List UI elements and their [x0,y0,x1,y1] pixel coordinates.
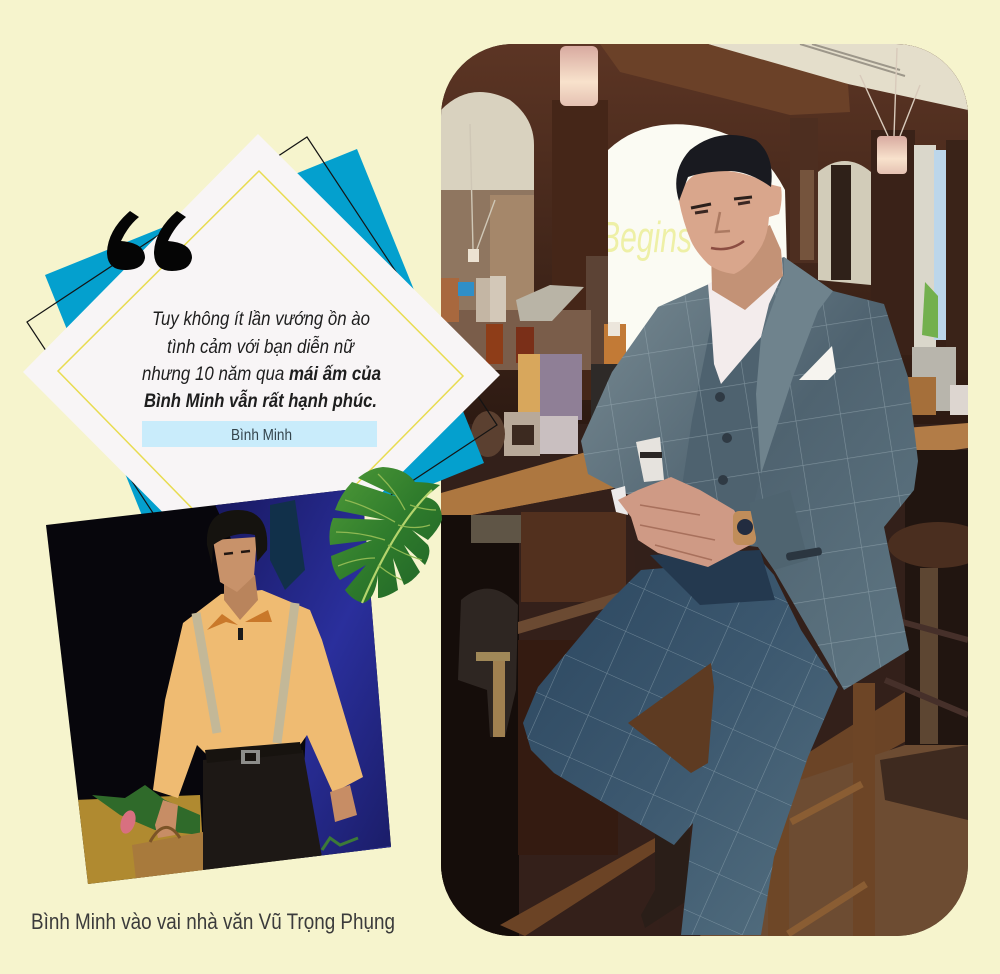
actor [153,510,363,872]
caption: Bình Minh vào vai nhà văn Vũ Trọng Phụng [31,909,395,934]
quotation mark [107,211,192,271]
plants and flower [92,785,358,850]
bar counter and panelling [441,423,968,936]
man: trousers [523,550,838,935]
quote text: Bình Minh vẫn rất hạnh phúc. [144,390,377,412]
basket [132,827,203,880]
quote text [142,309,381,412]
icon: monstera leaf [329,467,442,603]
quote text: tình cảm với bạn diễn nữ [167,337,356,358]
quote text: nhưng 10 năm qua mái ấm của [142,364,381,385]
bar room background: Begins [600,213,692,262]
bottles and bar items [441,276,968,457]
man: head [676,135,783,310]
attribution bar [142,421,377,447]
ceiling vent [800,44,905,76]
bar stools [768,522,968,936]
shoe [641,830,690,928]
black outline square [27,137,497,610]
small photo: stage role [40,480,400,890]
white diamond panel [23,134,500,612]
main photo: man seated at a bar [441,44,988,937]
blue square behind quote [45,149,484,590]
man: hands and watch [611,477,822,570]
pendant lamps [468,46,920,262]
curtain and stage backdrop [40,480,400,890]
bar room background [441,44,968,936]
man: jacket, vest and shirt [581,247,918,690]
yellow inner diamond [58,171,463,580]
attribution bar: Bình Minh [231,427,292,444]
quote text: Tuy không ít lần vướng ồn ào [152,309,370,330]
